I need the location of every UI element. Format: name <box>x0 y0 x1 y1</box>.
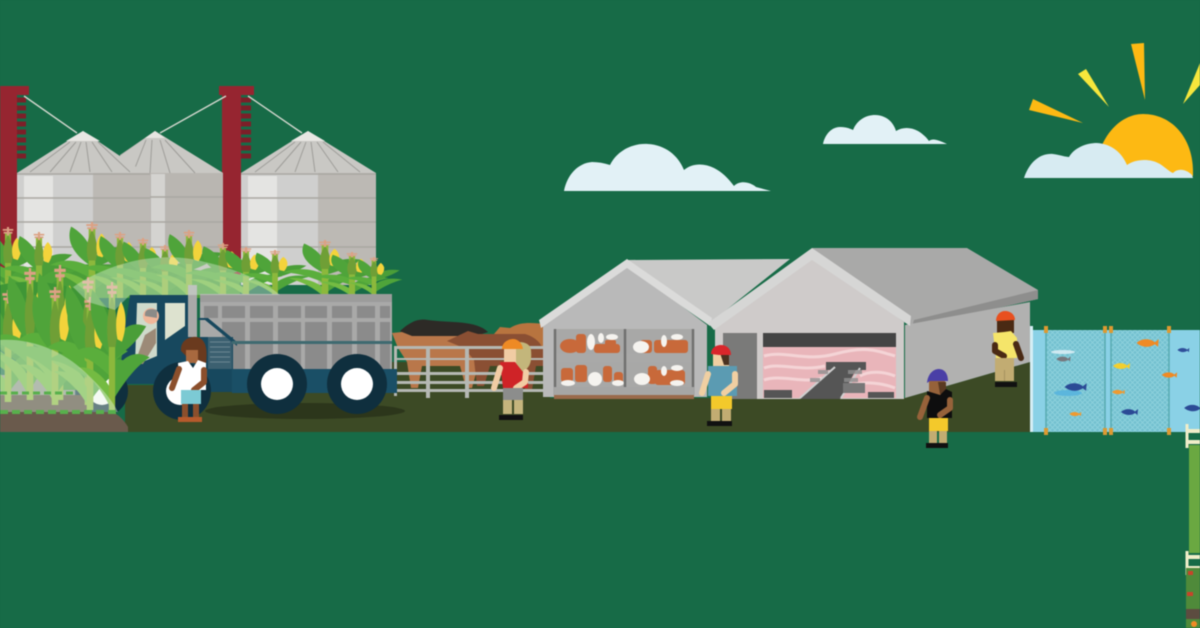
ground <box>125 362 1030 432</box>
icon: sun rays <box>1029 43 1200 123</box>
net panels <box>1046 330 1169 432</box>
person: man with yellow shirt <box>993 311 1021 387</box>
front wall <box>715 255 904 399</box>
silo: left <box>17 131 150 285</box>
door <box>723 333 757 399</box>
fish school <box>1051 339 1200 416</box>
red grain elevators <box>0 86 302 285</box>
person: woman with white shirt <box>172 337 207 422</box>
corn row behind truck <box>0 222 402 299</box>
pig pen opening <box>763 333 896 399</box>
orange cow <box>494 323 545 350</box>
front wall <box>543 265 707 397</box>
water spray mist <box>0 257 280 412</box>
roof <box>812 248 1038 327</box>
gable trim <box>539 259 712 328</box>
poultry barn <box>539 259 790 399</box>
wheel: middle <box>247 354 307 414</box>
corn field foreground <box>0 265 150 415</box>
person: man with black shirt <box>920 369 952 448</box>
chassis <box>198 318 237 346</box>
sun with rays and cloud <box>1024 43 1200 178</box>
silo: right <box>241 131 376 285</box>
black cow <box>400 319 488 338</box>
roof <box>627 259 790 323</box>
tan cow <box>392 332 484 388</box>
wheel: front <box>153 362 211 420</box>
fish pond <box>1030 326 1200 435</box>
wheel: hidden front <box>76 365 128 417</box>
person: woman with red shirt <box>494 339 531 420</box>
fence <box>394 346 544 398</box>
side wall <box>905 302 1030 398</box>
icon: sun disc <box>1100 114 1193 176</box>
trailer <box>200 294 392 370</box>
exhaust <box>188 285 197 345</box>
brown cow <box>447 331 544 390</box>
driver <box>135 308 159 364</box>
icon: cloud over sun <box>1024 143 1193 178</box>
soil bed with seedlings <box>0 393 128 432</box>
shadow <box>205 403 405 419</box>
cloud: upper right <box>823 115 947 144</box>
cages <box>554 329 694 395</box>
wheel: rear <box>327 354 387 414</box>
edge pasture with fences and vegetable plants <box>1186 424 1200 628</box>
cloud: centre <box>564 144 771 191</box>
gable trim <box>708 248 911 330</box>
net posts <box>1044 326 1171 435</box>
silo: middle <box>120 131 223 285</box>
person: man with blue shirt <box>702 345 737 426</box>
pig barn <box>708 248 1038 399</box>
cattle behind fence <box>392 319 545 390</box>
floor <box>554 395 694 399</box>
truck <box>72 285 405 420</box>
cab <box>72 295 240 395</box>
